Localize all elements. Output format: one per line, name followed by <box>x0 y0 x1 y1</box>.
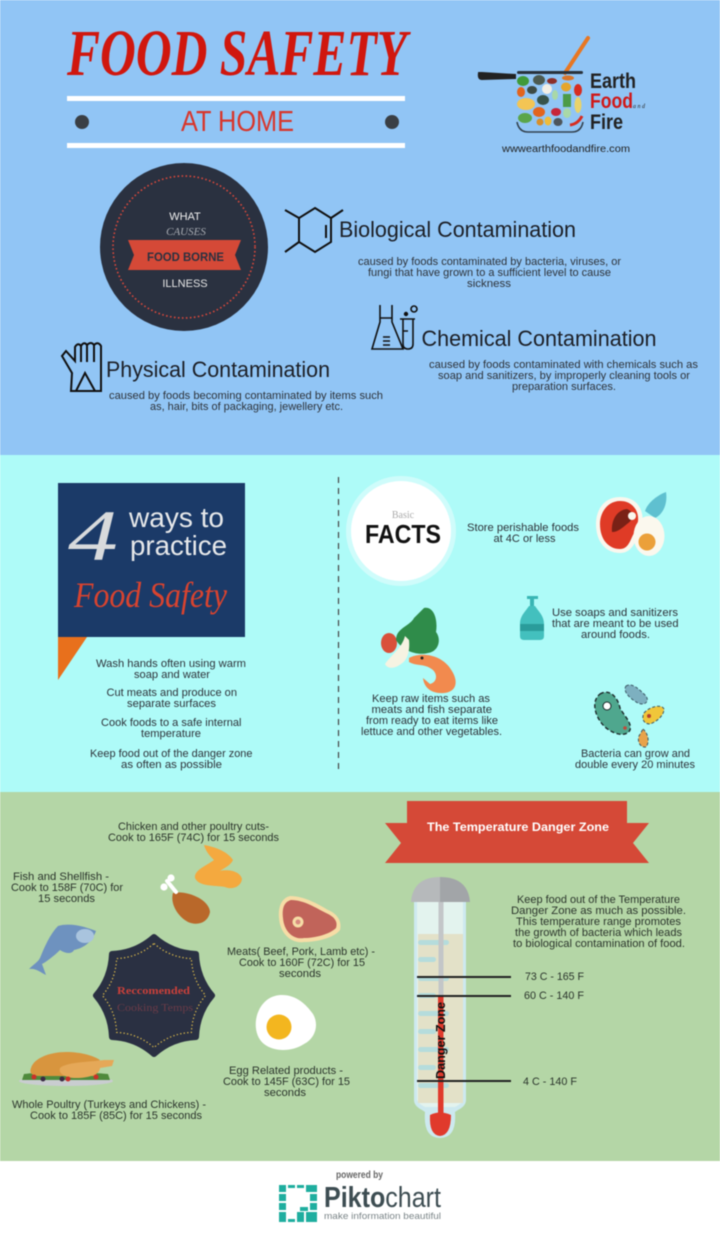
badge: what causes food borne illness: ILLNESS <box>162 278 208 290</box>
logo: Earth Food and Fire <box>479 38 646 134</box>
text: egg products <box>223 1065 350 1099</box>
text: store perishable foods <box>467 522 580 545</box>
logo: Earth Food and Fire: Food <box>590 90 633 113</box>
heading: physical contamination: Physical Contamination <box>106 357 330 382</box>
callout: 4 ways to practice food safety: Food Safety <box>73 575 227 615</box>
list: four ways: temperature <box>141 728 201 740</box>
thermometer <box>411 877 470 1138</box>
text: egg products: seconds <box>264 1087 306 1099</box>
text: whole poultry: Cook to 185F (85C) for 15 seconds <box>30 1110 202 1122</box>
icon: flask and test tube <box>372 305 417 349</box>
text: fish and shellfish: Cook to 158F (70C) for <box>11 882 123 894</box>
ribbon: food borne <box>128 240 241 270</box>
text: chemical description: preparation surfaces. <box>512 381 616 393</box>
footer: powered by Piktochart: make information beautiful <box>324 1211 441 1222</box>
text: fish and shellfish <box>11 871 123 905</box>
icon: chicken wing <box>195 845 242 888</box>
banner: the temperature danger zone <box>385 801 649 863</box>
list: four ways: Keep food out of the danger zone <box>90 748 252 760</box>
text: meats: seconds <box>279 968 321 980</box>
badge: what causes food borne illness: CAUSES <box>166 226 206 238</box>
text: chemical description: soap and sanitizers, by improperly cleaning tools or <box>438 370 690 382</box>
badge: recommended cooking temps <box>96 937 212 1054</box>
text: store perishable foods: at 4C or less <box>494 533 556 545</box>
list: four ways: Cook foods to a safe internal <box>101 717 242 729</box>
list: four ways: separate surfaces <box>127 698 217 710</box>
icon: molecule <box>285 208 343 252</box>
callout: 4 ways to practice food safety <box>58 483 245 680</box>
text: biological description: caused by foods contaminated by bacteria, viruses, or <box>358 256 621 268</box>
text: physical description <box>109 390 383 413</box>
badge: what causes food borne illness: WHAT <box>169 211 201 223</box>
text: biological description: sickness <box>467 278 512 290</box>
list: four ways: Wash hands often using warm <box>96 658 246 670</box>
subtitle: at home: AT HOME <box>181 106 294 138</box>
badge: basic facts: Basic <box>392 510 415 521</box>
logo mark <box>279 1185 317 1222</box>
text: whole poultry <box>12 1099 206 1122</box>
list: four ways <box>90 658 252 771</box>
text: physical description: caused by foods becoming contaminated by items such <box>109 390 383 402</box>
text: keep raw items separate <box>361 693 502 738</box>
text: egg products: Cook to 145F (63C) for 15 <box>223 1076 350 1088</box>
text: chemical description: caused by foods contaminated with chemicals such as <box>429 359 698 371</box>
heading: chemical contamination: Chemical Contamination <box>422 326 656 351</box>
callout: 4 ways to practice food safety: 4 <box>68 496 118 576</box>
text: egg products: Egg Related products - <box>229 1065 343 1077</box>
label: 73 C: 73 C - 165 F <box>525 971 584 983</box>
text: danger zone explanation: to biological contamination of food. <box>513 938 685 950</box>
label: 4 C: 4 C - 140 F <box>523 1076 577 1088</box>
list: four ways: as often as possible <box>121 759 222 771</box>
text: bacteria can grow <box>575 748 695 771</box>
icon: glove <box>62 343 101 391</box>
text: chicken cuts: Cook to 165F (74C) for 15 seconds <box>108 832 279 844</box>
text: meats: Meats( Beef, Pork, Lamb etc) - <box>227 946 375 958</box>
label: danger zone: Danger Zone <box>433 1002 448 1079</box>
text: danger zone explanation: Keep food out of the Temperature <box>517 894 680 906</box>
temperature marker lines <box>417 977 511 1081</box>
icon: vegetables and shrimp <box>381 608 456 693</box>
callout: 4 ways to practice food safety: practice <box>130 530 227 561</box>
icon: meat, egg and fish <box>596 492 666 556</box>
list: four ways: Cut meats and produce on <box>106 687 237 699</box>
text: fish and shellfish: 15 seconds <box>38 893 96 905</box>
footer: powered by Piktochart: powered by <box>336 1170 383 1181</box>
badge: recommended cooking temps: Cooking Temps <box>117 1002 193 1014</box>
ribbon: food borne: FOOD BORNE <box>147 250 224 264</box>
title: FOOD SAFETY <box>66 17 411 90</box>
text: danger zone explanation: the growth of bacteria which leads <box>515 927 682 939</box>
text: bacteria can grow: Bacteria can grow and <box>581 748 690 760</box>
badge: what causes food borne illness <box>100 163 268 331</box>
text: keep raw items separate: lettuce and other vegetables. <box>361 726 502 738</box>
text: physical description: as, hair, bits of packaging, jewellery etc. <box>150 401 343 413</box>
text: keep raw items separate: Keep raw items such as <box>372 693 490 705</box>
text: use soaps and sanitizers: Use soaps and sanitizers <box>552 607 679 619</box>
panel: cooking temps and danger zone <box>0 792 720 1161</box>
text: keep raw items separate: meats and fish separate <box>372 704 492 716</box>
text: biological description <box>358 256 621 290</box>
text: bacteria can grow: double every 20 minutes <box>575 759 695 771</box>
panel: header and contamination types <box>0 0 720 455</box>
text: whole poultry: Whole Poultry (Turkeys and Chickens) - <box>12 1099 206 1111</box>
text: danger zone explanation: This temperature range promotes <box>516 916 681 928</box>
logo: Earth Food and Fire: and <box>633 104 646 110</box>
label: 60 C: 60 C - 140 F <box>524 990 584 1002</box>
icon: steak <box>279 896 340 942</box>
panel: ways and basic facts <box>0 455 720 792</box>
text: use soaps and sanitizers: around foods. <box>581 629 650 641</box>
footer: powered by Piktochart <box>0 1161 720 1233</box>
text: chicken cuts: Chicken and other poultry cuts- <box>118 821 269 833</box>
text: meats <box>227 946 375 980</box>
text: use soaps and sanitizers <box>552 607 679 641</box>
logo: Earth Food and Fire: Earth <box>590 70 636 93</box>
text: store perishable foods: Store perishable foods <box>467 522 580 534</box>
badge: basic facts <box>346 476 456 586</box>
text: danger zone explanation: Danger Zone as much as possible. <box>511 905 686 917</box>
text: use soaps and sanitizers: that are meant to be used <box>552 618 678 630</box>
badge: recommended cooking temps: Reccomended <box>117 985 190 997</box>
icon: bacteria <box>595 685 664 747</box>
list: four ways: soap and water <box>134 669 210 681</box>
text: danger zone explanation <box>511 894 686 950</box>
icon: roast turkey <box>19 1052 114 1086</box>
subtitle: at home <box>67 96 405 148</box>
icon: fried egg <box>256 995 316 1050</box>
text: meats: Cook to 160F (72C) for 15 <box>239 957 365 969</box>
icon: soap bottle <box>520 596 544 640</box>
text: fish and shellfish: Fish and Shellfish - <box>13 871 109 883</box>
text: keep raw items separate: from ready to eat items like <box>366 715 498 727</box>
text: chemical description <box>429 359 698 393</box>
text: chicken cuts <box>108 821 279 844</box>
icon: fish <box>29 925 96 975</box>
footer: powered by Piktochart: Piktochart <box>324 1182 441 1214</box>
text: biological description: fungi that have grown to a sufficient level to cause <box>368 267 611 279</box>
callout: 4 ways to practice food safety: ways to <box>128 502 224 533</box>
website url: wwwearthfoodandfire.com <box>501 144 630 155</box>
heading: biological contamination: Biological Contamination <box>339 217 576 242</box>
badge: basic facts: FACTS <box>365 519 441 549</box>
logo: Earth Food and Fire: Fire <box>590 111 623 134</box>
icon: drumstick <box>160 874 210 924</box>
banner: the temperature danger zone: The Temperature Danger Zone <box>427 822 609 834</box>
